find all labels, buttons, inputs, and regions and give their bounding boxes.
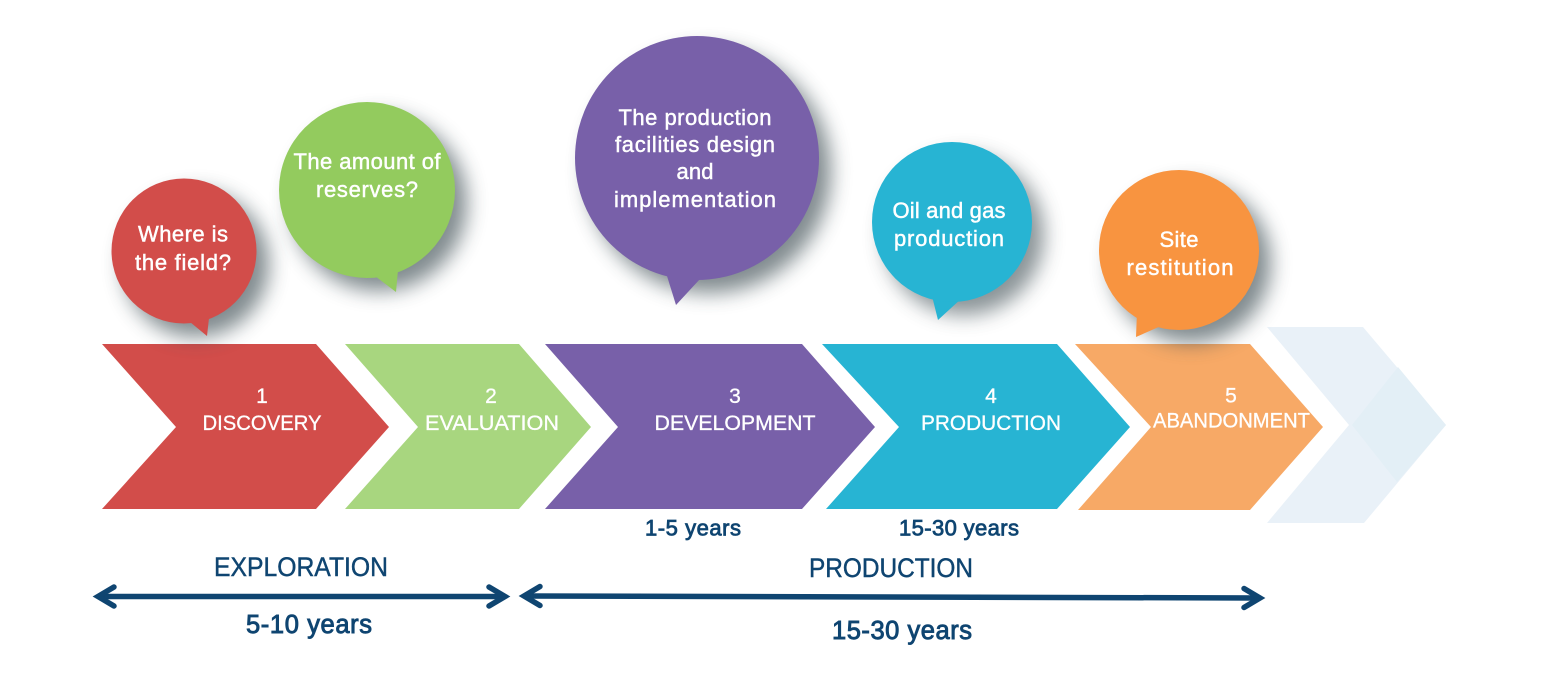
chevron: abandonment: 5 [1225,384,1237,408]
bubble: oil and gas production: Oil and gas [892,198,1006,223]
heading: production: PRODUCTION [809,553,973,583]
arrow: exploration span [98,587,505,606]
chevron: production: 4 [985,385,997,408]
chevron: evaluation [345,344,591,509]
chevron: development: DEVELOPMENT [654,412,816,435]
bubble: oil and gas production [872,142,1044,320]
bubble: site restitution: Site [1160,227,1198,252]
chevron: production [822,344,1130,509]
chevron: evaluation: 2 [485,385,497,408]
bubble: facilities design: and [676,159,714,184]
chevron: abandonment: ABANDONMENT [1153,410,1310,432]
bubble: facilities design: implementation [614,187,776,212]
duration label: production phase: 15-30 years [832,617,972,645]
chevron: production: PRODUCTION [921,412,1061,435]
arrow: production span [524,586,1260,608]
bubble: facilities design: facilities design [615,132,775,157]
chevron: development: 3 [729,385,741,408]
bubble: site restitution: restitution [1126,255,1234,280]
duration label: exploration: 5-10 years [246,611,372,639]
bubble: where is the field [112,178,269,337]
bubble: facilities design: The production [618,105,772,130]
duration label: development: 1-5 years [645,516,741,540]
bubble: amount of reserves [279,102,467,292]
chevron: discovery: DISCOVERY [202,412,322,435]
bubble: oil and gas production: production [894,226,1004,251]
chevron: abandonment [1075,344,1323,510]
duration label: production: 15-30 years [899,516,1019,540]
chevron: faded final step [1267,327,1446,523]
chevron: evaluation: EVALUATION [425,412,559,435]
bubble: facilities design [575,36,831,305]
bubble: where is the field: the field? [135,250,231,275]
chevron: discovery: 1 [256,385,268,408]
heading: exploration: EXPLORATION [214,552,388,582]
bubble: amount of reserves: reserves? [316,177,418,202]
bubble: site restitution [1099,170,1271,343]
chevron: development [545,344,875,509]
chevron: discovery [102,344,389,509]
bubble: amount of reserves: The amount of [294,149,441,174]
bubble: where is the field: Where is [138,222,228,246]
